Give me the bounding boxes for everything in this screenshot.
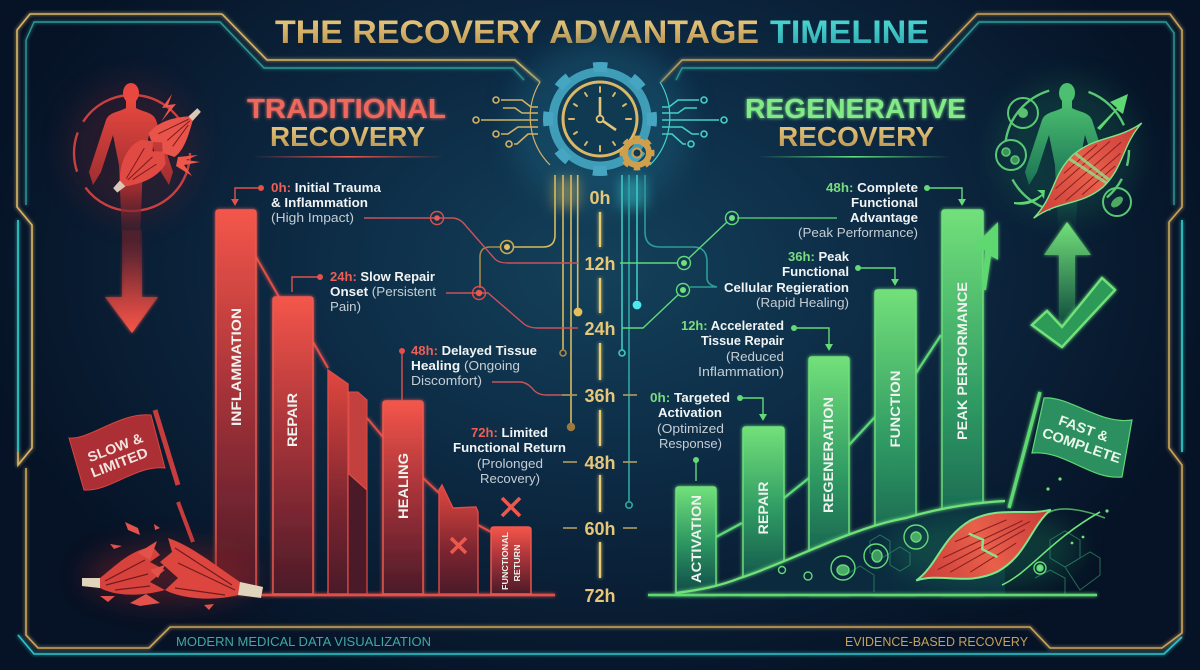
icon: broken muscle: [82, 522, 263, 610]
callout: 0h: Response): [659, 436, 722, 451]
footer text: left: MODERN MEDICAL DATA VISUALIZATION: [176, 634, 431, 649]
bar: healing: HEALING: [395, 453, 411, 519]
callout: 48h: 48h: Complete: [826, 180, 918, 195]
heading: traditional recovery: TRADITIONAL: [247, 93, 446, 124]
panel: traditional recovery chart: [216, 210, 555, 595]
cells: [778, 525, 1046, 580]
callout: 48h: Functional: [851, 195, 918, 210]
connector lines: regenerative: [620, 212, 837, 328]
heading: traditional recovery: [247, 93, 446, 158]
bar: regeneration: [809, 357, 849, 594]
callout: 12h: [681, 318, 833, 379]
panel: regenerative recovery chart: [676, 210, 998, 594]
callout: 12h: Tissue Repair: [701, 333, 784, 348]
time labels: 72h: [584, 586, 616, 606]
baseline and decline lines: [256, 257, 555, 595]
arrow: peak: [972, 222, 998, 290]
timeline dashes: [599, 212, 601, 578]
hexagon tissue lattice: [846, 531, 1100, 594]
time labels: 12h: [584, 254, 616, 274]
rising trend lines: [716, 335, 941, 537]
flag: slow and limited: LIMITED: [88, 444, 150, 481]
callout: 48h: 48h: Delayed Tissue: [411, 343, 537, 358]
callout: 48h: (Peak Performance): [798, 225, 918, 240]
callout: 12h: (Reduced: [726, 349, 784, 364]
callout: 72h: 72h: Limited: [471, 425, 548, 440]
callout: 24h: [292, 269, 436, 314]
gold vertical traces: [480, 175, 582, 430]
time labels: 36h: [584, 386, 616, 406]
bar: repair: [273, 297, 313, 594]
time labels: [584, 188, 616, 606]
bar: functional return: FUNCTIONAL: [500, 532, 510, 590]
arrow: green up: [1044, 222, 1091, 322]
callout: 0h: 0h: Initial Trauma: [271, 180, 382, 195]
callout: 72h: (Prolonged: [477, 456, 543, 471]
callout: 0h: & Inflammation: [271, 195, 368, 210]
bar: falling: [439, 485, 478, 594]
callout: 12h: Inflammation): [698, 364, 784, 379]
callout: 0h: (High Impact): [271, 210, 354, 225]
teal vertical traces: [619, 175, 717, 508]
callout: 36h: [724, 249, 899, 310]
callout: 0h: [650, 390, 767, 481]
bar: healing: [383, 401, 423, 594]
callout: 48h: Healing (Ongoing: [411, 358, 520, 373]
connector lines: traditional: [364, 212, 578, 395]
illustration: regeneration curve with cells and muscle: [648, 477, 1109, 606]
heading: traditional recovery: RECOVERY: [270, 121, 425, 152]
callout: 12h: 12h: Accelerated: [681, 318, 784, 333]
icon: x marks: [451, 498, 520, 553]
sparkles: [1046, 477, 1109, 544]
flag: fast and complete: [1009, 392, 1132, 508]
title: THE RECOVERY ADVANTAGE: [275, 14, 759, 50]
time labels: 48h: [584, 453, 616, 473]
flag: fast and complete: COMPLETE: [1040, 424, 1123, 466]
callout: 48h: Advantage: [850, 210, 918, 225]
heading: regenerative recovery: RECOVERY: [778, 121, 934, 152]
callout: 36h: Functional: [782, 264, 849, 279]
time labels: 60h: [584, 519, 616, 539]
callout: 0h: 0h: Targeted: [650, 390, 730, 405]
bar: repair: [743, 427, 784, 594]
callouts: traditional recovery: [231, 180, 566, 486]
callout: 0h: Activation: [658, 405, 722, 420]
bar: activation: ACTIVATION: [688, 495, 704, 583]
title: TIMELINE: [770, 14, 929, 50]
icon: cells: [996, 98, 1131, 216]
callout: 24h: Pain): [330, 299, 361, 314]
bar: repair: REPAIR: [284, 393, 300, 447]
callout: 24h: Onset (Persistent: [330, 284, 436, 299]
flag: slow and limited: [69, 410, 193, 542]
callouts: regenerative recovery: [650, 180, 966, 481]
bar: repair: REPAIR: [755, 482, 771, 534]
bar: inflammation: [216, 210, 256, 594]
callout: 0h: [231, 180, 382, 225]
icon: injured body with torn muscle: [67, 80, 211, 262]
callout: 0h: (Optimized: [657, 421, 724, 436]
icon: regenerating body with healing muscle: [996, 80, 1157, 240]
bar: functional return: [491, 527, 531, 594]
footer text: right: EVIDENCE-BASED RECOVERY: [845, 634, 1028, 649]
side ticks: [562, 395, 637, 528]
flag: slow and limited: SLOW &: [85, 429, 145, 465]
timeline spine: [480, 175, 717, 606]
callout: 48h: [798, 180, 966, 240]
callout: 36h: (Rapid Healing): [756, 295, 849, 310]
bar: function: [875, 290, 916, 594]
bar: peak performance: [942, 210, 983, 594]
base and rising curve: [648, 594, 1097, 596]
icon: green check: [1032, 278, 1115, 347]
title: [275, 14, 929, 50]
time labels: 24h: [584, 319, 616, 339]
callout: 72h: Recovery): [480, 471, 540, 486]
heading: regenerative recovery: REGENERATIVE: [745, 93, 966, 124]
bar: stepped decline: [328, 370, 367, 594]
bar: inflammation: INFLAMMATION: [228, 308, 244, 426]
callout: 36h: Cellular Regieration: [724, 280, 849, 295]
bar: peak performance: PEAK PERFORMANCE: [954, 282, 970, 440]
bar: functional return: RETURN: [512, 544, 522, 582]
bar: function: FUNCTION: [887, 370, 903, 448]
callout: 24h: 24h: Slow Repair: [330, 269, 435, 284]
healing muscle: [903, 486, 1065, 606]
icon: clock with gears and circuit traces: [473, 40, 727, 210]
callout: 36h: 36h: Peak: [788, 249, 850, 264]
time labels: 0h: [589, 188, 611, 208]
callout: 72h: [453, 425, 566, 486]
bar: regeneration: REGENERATION: [820, 397, 836, 513]
area under curve: [676, 501, 1005, 594]
callout: 48h: [399, 343, 537, 401]
flag: fast and complete: FAST &: [1057, 412, 1111, 445]
callout: 72h: Functional Return: [453, 440, 566, 455]
callout: 48h: Discomfort): [411, 373, 482, 388]
heading: regenerative recovery: [745, 93, 966, 158]
arrow: red down: [105, 230, 158, 333]
trace glow: [553, 178, 646, 208]
bar: activation: [676, 487, 716, 594]
